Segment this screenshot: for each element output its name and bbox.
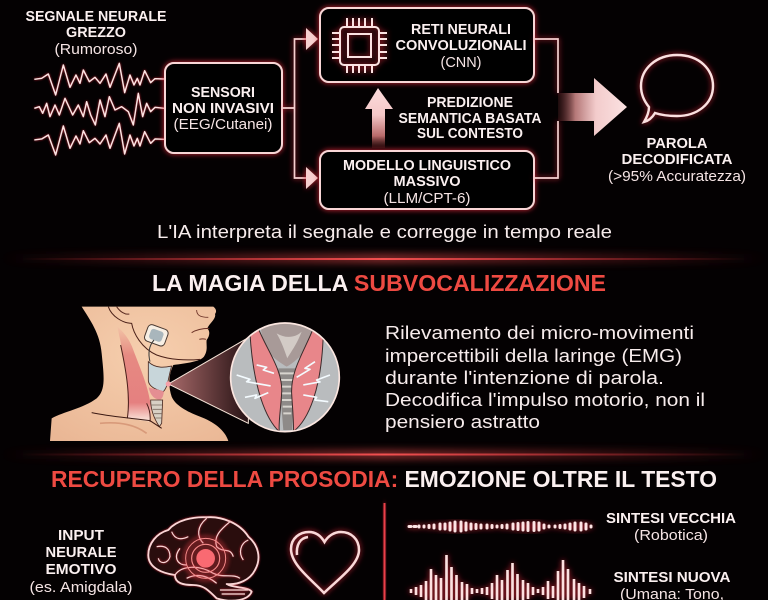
label: raw neural signal [26,8,166,58]
label: decoded word: (>95% Accuratezza) [608,168,746,185]
box: CNN [320,8,534,82]
label: emotional neural input: EMOTIVO [46,561,117,578]
label: raw neural signal: GREZZO [66,24,126,41]
illustration: neck with sensor and magnified larynx [50,307,340,441]
arrow: up from LLM to CNN [365,88,393,148]
label: new synthesis [614,569,731,600]
text block: EMG explanation: impercettibili della laringe (EMG) [385,345,682,366]
caption: AI interprets: L'IA interpreta il segnale e corregge in tempo reale [157,221,612,242]
label: decoded word [608,135,746,185]
label: old synthesis [606,510,736,544]
sternocleidomastoid muscle [117,327,151,422]
text block: EMG explanation [385,322,705,432]
text block: EMG explanation: Decodifica l'impulso motorio, non il [385,389,705,410]
waveform: new human synthesis [411,555,590,600]
box: CNN: RETI NEURALI [411,21,511,38]
label: emotional neural input: NEURALE [46,544,116,561]
label: new synthesis: SINTESI NUOVA [614,569,731,586]
line: brain to heart [215,559,291,561]
heading: prosody recovery: RECUPERO DELLA PROSODIA: EMOZIONE OLTRE IL TESTO [51,466,717,492]
box: massive language model: (LLM/CPT-6) [384,190,470,207]
label: decoded word: PAROLA [646,135,708,152]
magnifier cone [168,337,250,423]
label: decoded word: DECODIFICATA [622,151,733,168]
icon: brain with amygdala highlight [148,517,258,600]
box: massive language model: MASSIVO [394,173,461,190]
box: non-invasive sensors: SENSORI [191,84,255,101]
box: massive language model: MODELLO LINGUISTICO [343,157,511,174]
text block: EMG explanation: durante l'intenzione di parola. [385,367,664,388]
icon: EMG sensor [143,324,169,362]
sparks [237,362,330,402]
label: emotional neural input: (es. Amigdala) [30,579,132,596]
label: semantic prediction [398,94,542,142]
label: raw neural signal: (Rumoroso) [54,41,138,58]
text block: EMG explanation: pensiero astratto [385,411,540,432]
icon: speech bubble [641,55,713,122]
text block: EMG explanation: Rilevamento dei micro-movimenti [385,322,694,343]
heading: subvocalization: LA MAGIA DELLA SUBVOCALIZZAZIONE [152,270,606,296]
inset circle [230,322,340,435]
label: semantic prediction: SUL CONTESTO [417,125,523,142]
box: CNN: CONVOLUZIONALI [396,37,526,54]
box: non-invasive sensors: NON INVASIVI [172,100,274,117]
label: old synthesis: (Robotica) [634,527,708,544]
box: non-invasive sensors [165,63,282,153]
label: emotional neural input: INPUT [58,527,105,544]
label: emotional neural input [30,527,132,596]
label: raw neural signal: SEGNALE NEURALE [26,8,166,25]
icon: noisy signal waves [34,63,164,155]
box: massive language model [320,151,534,209]
icon: heart [291,532,359,593]
box: non-invasive sensors: (EEG/Cutanei) [174,116,272,133]
label: semantic prediction: PREDIZIONE [427,94,513,111]
arrow: merge to decoded word [534,39,627,178]
box: CNN: (CNN) [440,54,482,71]
arrow: sensors to CNN and LLM [282,28,318,189]
neck and head [50,307,228,441]
larynx [148,362,172,392]
icon: chip [332,18,387,73]
label: old synthesis: SINTESI VECCHIA [606,510,736,527]
vertical divider [384,503,386,600]
waveform: old robotic synthesis [409,522,591,531]
label: semantic prediction: SEMANTICA BASATA [398,110,542,127]
